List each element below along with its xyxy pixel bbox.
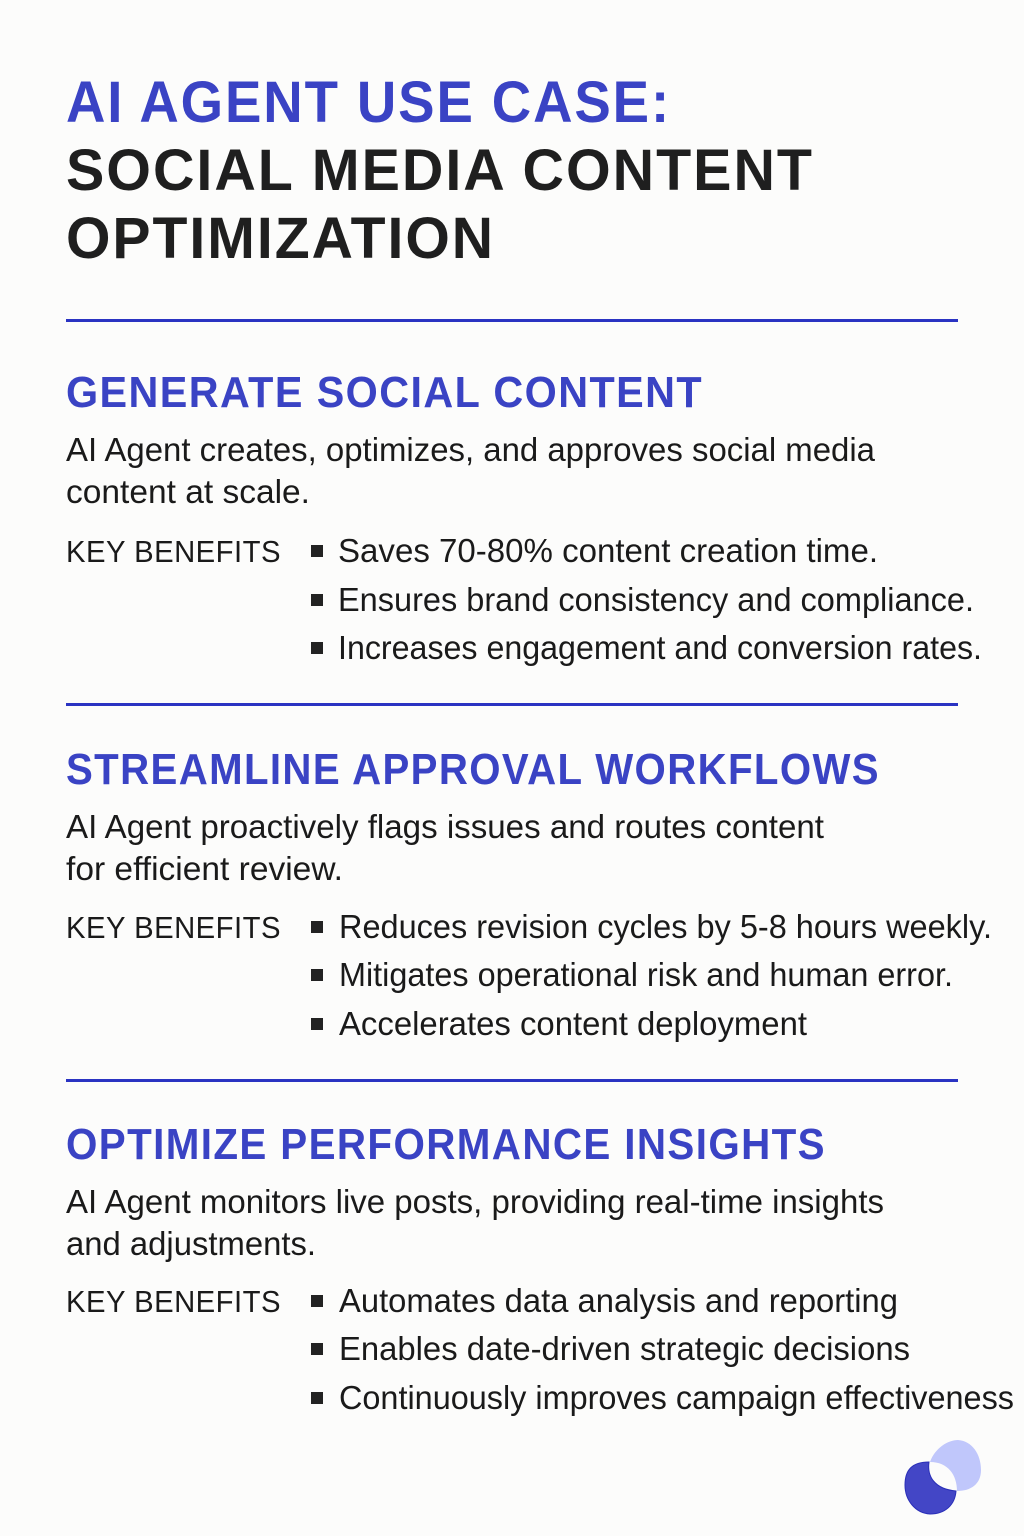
title: AI AGENT USE CASE: (66, 70, 671, 135)
description: optimize performance insights: AI Agent monitors live posts, providing real-time insights (66, 1183, 884, 1220)
benefits list: Continuously improves campaign effectiveness (339, 1379, 1014, 1416)
benefits list: Mitigates operational risk and human error. (339, 956, 953, 993)
benefits list: Saves 70-80% content creation time. (338, 532, 878, 569)
description: streamline approval workflows: for efficient review. (66, 850, 343, 887)
benefits list: Enables date-driven strategic decisions (339, 1330, 910, 1367)
benefits list (311, 1282, 1014, 1416)
title: OPTIMIZATION (66, 206, 495, 271)
label: key benefits: KEY BENEFITS (66, 1284, 281, 1319)
title: SOCIAL MEDIA CONTENT (66, 138, 814, 203)
benefits list: Reduces revision cycles by 5-8 hours weekly. (339, 908, 992, 945)
description: optimize performance insights (66, 1183, 884, 1262)
benefits list (311, 908, 992, 1042)
panel: optimize performance insights (66, 1120, 1014, 1416)
description: streamline approval workflows (66, 808, 824, 887)
benefits list: Automates data analysis and reporting (339, 1282, 898, 1319)
description: generate social content (66, 431, 876, 510)
icon: overlapping logo (905, 1440, 981, 1514)
title (66, 70, 814, 271)
heading: streamline approval workflows: STREAMLINE APPROVAL WORKFLOWS (66, 745, 880, 794)
label: key benefits: KEY BENEFITS (66, 534, 281, 569)
benefits list: Ensures brand consistency and compliance. (338, 581, 974, 618)
benefits list: Increases engagement and conversion rates. (338, 629, 982, 666)
benefits list (311, 532, 982, 666)
benefits list: Accelerates content deployment (339, 1005, 807, 1042)
heading: generate social content: GENERATE SOCIAL CONTENT (66, 368, 703, 417)
description: generate social content: AI Agent creates, optimizes, and approves social media (66, 431, 876, 468)
description: generate social content: content at scale. (66, 473, 310, 510)
label: key benefits: KEY BENEFITS (66, 910, 281, 945)
heading: optimize performance insights: OPTIMIZE PERFORMANCE INSIGHTS (66, 1120, 826, 1169)
description: streamline approval workflows: AI Agent proactively flags issues and routes content (66, 808, 824, 845)
description: optimize performance insights: and adjustments. (66, 1225, 316, 1262)
panel: streamline approval workflows (66, 745, 992, 1042)
panel: generate social content (66, 368, 982, 666)
